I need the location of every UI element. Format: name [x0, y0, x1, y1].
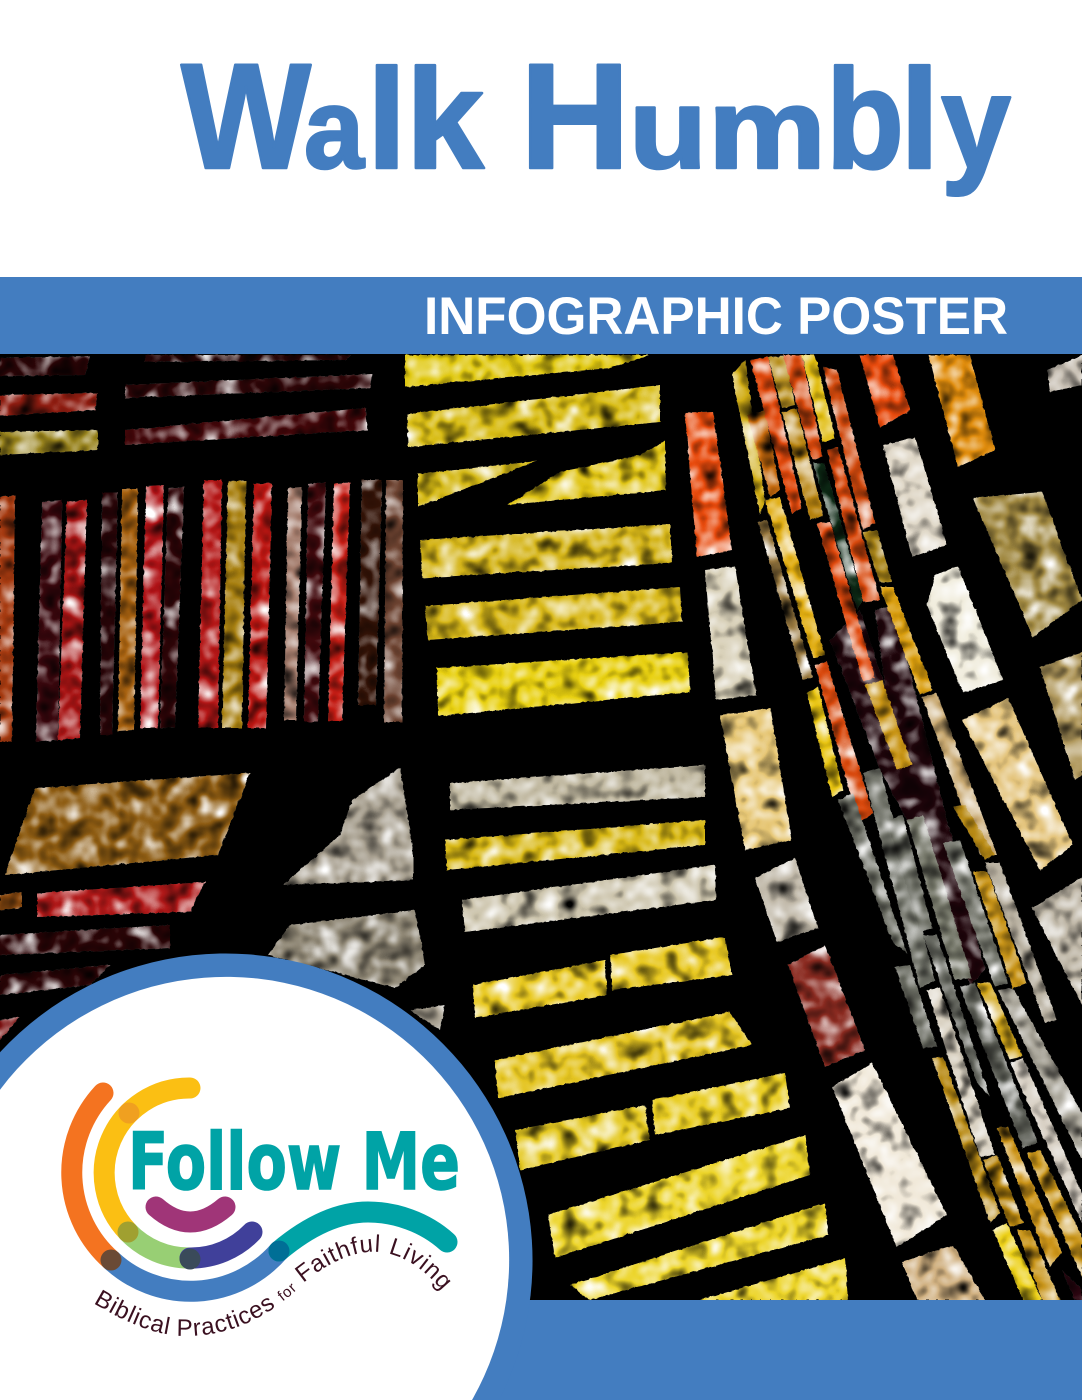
logo wave: blue: [111, 1251, 279, 1291]
bottom blue band: [0, 1300, 1082, 1400]
title: W: [181, 32, 311, 200]
logo arc: orange: [72, 1093, 111, 1260]
diagonal strip bundle: lower: [838, 768, 1082, 1300]
title: l: [367, 40, 406, 199]
logo arc: green: [128, 1232, 190, 1258]
title: l: [900, 40, 939, 199]
title: a: [304, 66, 366, 193]
right side panes: [860, 355, 1082, 1005]
logo arc: indigo: [190, 1232, 252, 1258]
subtitle text: INFOGRAPHIC POSTER: [424, 287, 1008, 346]
logo wordmark: Follow Me: [128, 1118, 460, 1208]
logo overlap dots: [100, 1102, 290, 1270]
title: H: [520, 32, 630, 200]
title: y: [941, 48, 1011, 197]
central column panes: [685, 412, 985, 1300]
title: u: [629, 66, 707, 193]
title: k: [406, 40, 485, 199]
vertical red and amber bars: [0, 480, 403, 742]
central yellow panes: [405, 355, 848, 1300]
logo smile: purple: [156, 1207, 225, 1222]
subtitle band: [0, 277, 1082, 354]
title: m: [708, 66, 826, 193]
logo: Follow Me: [61, 1078, 460, 1336]
photo: stained glass window: [0, 354, 1082, 1300]
logo arc: yellow: [104, 1088, 190, 1232]
top-left horizontal panes: [0, 355, 372, 455]
logo tagline: Biblical Practices for Faithful Living: [94, 1234, 450, 1336]
title: b: [826, 40, 904, 199]
logo wave: teal: [279, 1212, 447, 1251]
diagonal strip bundle: upper: [732, 355, 997, 985]
logo circle: [0, 954, 533, 1400]
lower-left panes: [0, 768, 445, 1040]
